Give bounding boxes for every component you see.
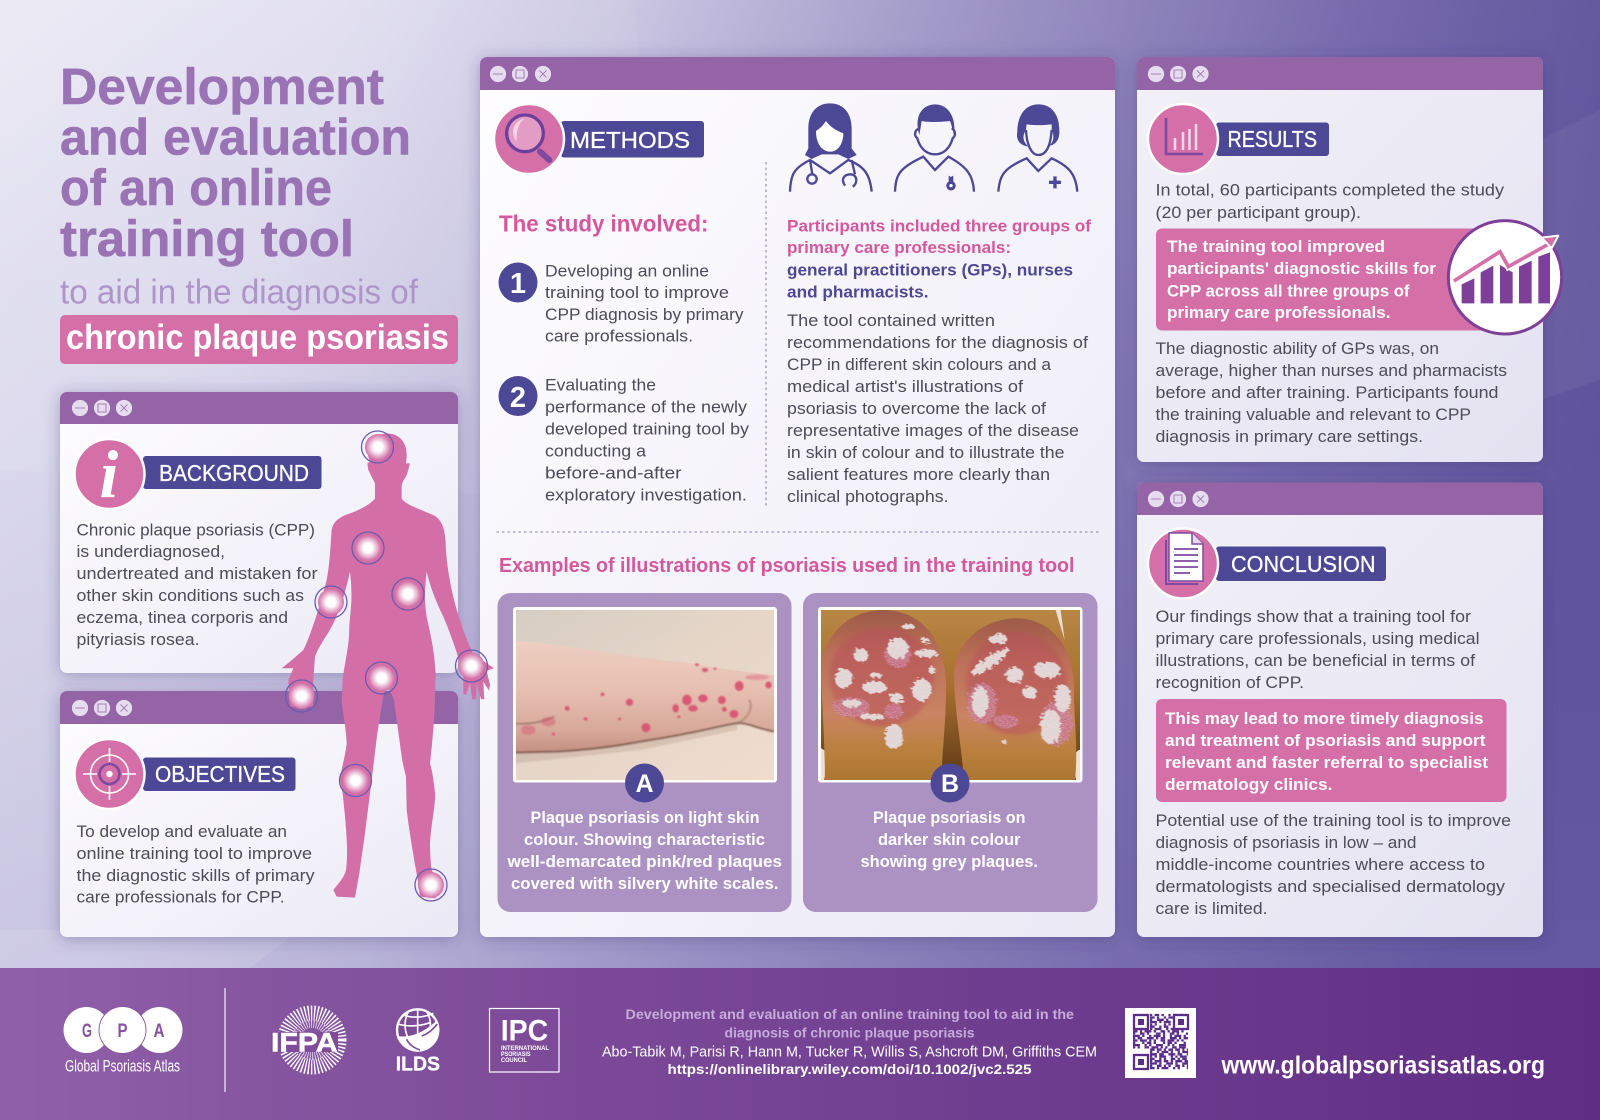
logo: IPC: IPC xyxy=(501,1015,548,1048)
step 2: before-and-after xyxy=(545,464,682,482)
step 2: exploratory investigation. xyxy=(545,486,747,504)
label: results: RESULTS xyxy=(1228,126,1317,152)
caption B xyxy=(860,808,1038,871)
objectives text: care professionals for CPP. xyxy=(76,888,284,906)
icon: nurse xyxy=(895,104,974,192)
caption A: colour. Showing characteristic xyxy=(524,830,765,849)
background text: Chronic plaque psoriasis (CPP) xyxy=(76,520,315,540)
card A xyxy=(498,593,792,912)
citation xyxy=(602,1006,1097,1077)
caption A xyxy=(506,808,782,893)
panel: methods xyxy=(480,57,1115,937)
panel: objectives xyxy=(60,691,458,937)
caption B: Plaque psoriasis on xyxy=(873,808,1026,827)
title: training tool xyxy=(60,210,354,267)
title xyxy=(60,58,419,312)
background text: undertreated and mistaken for xyxy=(76,564,318,583)
icon: doctor xyxy=(790,103,872,192)
logo: IPC: COUNCIL xyxy=(501,1058,527,1064)
step 1: training tool to improve xyxy=(545,283,729,302)
spot: abdomen xyxy=(392,578,424,610)
background text: is underdiagnosed, xyxy=(76,542,225,561)
callout: improved skills: primary care professionals. xyxy=(1167,303,1390,322)
badge B xyxy=(930,764,970,802)
participants text: and pharmacists. xyxy=(787,282,928,302)
conclusion intro: illustrations, can be beneficial in terms of xyxy=(1156,651,1475,670)
callout: improved skills: The training tool improved xyxy=(1167,237,1385,256)
icon: bar chart xyxy=(1148,104,1218,174)
objectives text: online training tool to improve xyxy=(76,844,312,863)
objectives text: the diagnostic skills of primary xyxy=(76,866,315,885)
logo: IFPA xyxy=(271,1013,339,1067)
caption B: darker skin colour xyxy=(878,830,1021,849)
callout: timely diagnosis: and treatment of psoriasis and support xyxy=(1165,731,1486,750)
badge A: A xyxy=(635,770,654,798)
caption A: well-demarcated pink/red plaques xyxy=(506,852,782,871)
window controls xyxy=(490,66,552,82)
QR code xyxy=(1125,1008,1196,1078)
spot: right hand xyxy=(456,650,488,682)
citation: diagnosis of chronic plaque psoriasis xyxy=(724,1024,975,1040)
results detail: the training valuable and relevant to CPP xyxy=(1156,405,1471,424)
heading: examples: Examples of illustrations of psoriasis used in the training tool xyxy=(499,555,1074,577)
callout: timely diagnosis: dermatology clinics. xyxy=(1165,775,1332,794)
step 2: conducting a xyxy=(545,442,647,460)
spot: left hand xyxy=(286,680,318,712)
results intro: In total, 60 participants completed the study xyxy=(1156,180,1505,200)
logo: IFPA: IFPA xyxy=(271,1028,338,1058)
results intro xyxy=(1156,180,1505,222)
icon: magnifying glass xyxy=(494,104,564,174)
icon: rising chart xyxy=(1448,221,1562,334)
card B xyxy=(803,593,1098,912)
panel: background xyxy=(60,392,458,673)
tool description: The tool contained written xyxy=(787,311,995,330)
logo: IPC: PSORIASIS xyxy=(501,1052,530,1058)
objectives text xyxy=(76,822,315,906)
spot: knee xyxy=(340,764,372,796)
objectives text: To develop and evaluate an xyxy=(76,822,287,841)
conclusion detail: dermatologists and specialised dermatology xyxy=(1156,877,1506,896)
body figure with spots xyxy=(282,431,494,901)
callout: improved skills: participants' diagnostic skills for xyxy=(1167,259,1436,278)
results detail: before and after training. Participants found xyxy=(1156,383,1498,402)
tool description xyxy=(787,311,1088,506)
logo: Global Psoriasis Atlas: P xyxy=(118,1021,128,1042)
spot: head xyxy=(362,431,394,463)
citation: Development and evaluation of an online training tool to aid in the xyxy=(626,1006,1074,1022)
step 1: 1 xyxy=(510,268,526,300)
icon: target xyxy=(74,739,144,809)
step 2: performance of the newly xyxy=(545,398,748,416)
step 2: Evaluating the xyxy=(545,376,656,394)
panel: results xyxy=(1137,57,1562,462)
badge B: B xyxy=(941,770,959,798)
label: methods: METHODS xyxy=(570,127,690,153)
callout: timely diagnosis xyxy=(1156,699,1506,802)
title: of an online xyxy=(60,159,332,216)
tool description: representative images of the disease xyxy=(787,421,1079,440)
window controls xyxy=(72,700,132,716)
background text: eczema, tinea corporis and xyxy=(76,608,288,627)
results detail: diagnosis in primary care settings. xyxy=(1156,427,1423,446)
label: results xyxy=(1216,122,1329,156)
tool description: in skin of colour and to illustrate the xyxy=(787,443,1064,462)
illustration A: arm xyxy=(515,610,775,780)
spot: hip xyxy=(366,662,398,694)
callout: timely diagnosis: relevant and faster referral to specialist xyxy=(1165,753,1488,772)
label: objectives: OBJECTIVES xyxy=(155,761,285,787)
caption B: showing grey plaques. xyxy=(860,852,1038,871)
logo: IPC xyxy=(490,1008,559,1072)
title: Development xyxy=(60,58,384,115)
callout: improved skills: CPP across all three groups of xyxy=(1167,282,1410,300)
heading: the study involved: The study involved: xyxy=(499,210,708,236)
conclusion intro: Our findings show that a training tool for xyxy=(1156,607,1471,626)
icon: information: i xyxy=(100,436,119,512)
step 2 xyxy=(498,376,750,504)
conclusion detail: Potential use of the training tool is to improve xyxy=(1156,811,1511,830)
step 2: 2 xyxy=(510,382,526,414)
window controls xyxy=(72,400,132,416)
window controls xyxy=(1148,490,1209,508)
icon: information xyxy=(74,436,144,512)
conclusion detail xyxy=(1156,811,1511,918)
logo: ILDS: ILDS xyxy=(396,1054,440,1076)
callout: improved skills xyxy=(1156,228,1506,330)
tool description: CPP in different skin colours and a xyxy=(787,355,1052,374)
background text: other skin conditions such as xyxy=(76,586,304,605)
callout: timely diagnosis: This may lead to more timely diagnosis xyxy=(1165,709,1484,728)
conclusion intro: primary care professionals, using medical xyxy=(1156,629,1480,648)
spot: chest xyxy=(352,532,384,564)
tool description: clinical photographs. xyxy=(787,487,948,506)
spot: left arm xyxy=(315,586,347,618)
conclusion detail: diagnosis of psoriasis in low – and xyxy=(1156,833,1416,852)
tool description: recommendations for the diagnosis of xyxy=(787,333,1088,352)
step 1: Developing an online xyxy=(545,262,709,280)
results intro: (20 per participant group). xyxy=(1156,203,1361,222)
logo: Global Psoriasis Atlas: Global Psoriasis Atlas xyxy=(65,1056,180,1076)
step 1 xyxy=(498,262,744,346)
icon: document xyxy=(1148,528,1218,598)
conclusion intro xyxy=(1156,607,1480,692)
step 1: CPP diagnosis by primary xyxy=(545,305,744,324)
citation: https://onlinelibrary.wiley.com/doi/10.1002/jvc2.525 xyxy=(668,1061,1032,1077)
title highlight: chronic plaque psoriasis: chronic plaque psoriasis xyxy=(66,318,449,357)
panel: conclusion xyxy=(1137,482,1543,937)
participants text: primary care professionals: xyxy=(787,238,1011,257)
participants text: Participants included three groups of xyxy=(787,216,1091,236)
results detail: average, higher than nurses and pharmacists xyxy=(1156,361,1507,380)
website: www.globalpsoriasisatlas.org xyxy=(1221,1052,1545,1080)
label: background: BACKGROUND xyxy=(159,460,309,486)
logo: Global Psoriasis Atlas: A xyxy=(154,1021,165,1042)
caption A: covered with silvery white scales. xyxy=(511,874,778,893)
results detail xyxy=(1156,339,1507,446)
logo: IPC: INTERNATIONAL xyxy=(501,1046,549,1052)
participants text: general practitioners (GPs), nurses xyxy=(787,260,1073,280)
citation: Abo-Tabik M, Parisi R, Hann M, Tucker R, Willis S, Ashcroft DM, Griffiths CEM xyxy=(602,1044,1097,1060)
results detail: The diagnostic ability of GPs was, on xyxy=(1156,339,1439,358)
window controls xyxy=(1148,66,1209,82)
caption A: Plaque psoriasis on light skin xyxy=(530,808,760,827)
background text: pityriasis rosea. xyxy=(76,630,200,649)
logo: Global Psoriasis Atlas: G xyxy=(82,1021,92,1042)
logo: ILDS xyxy=(396,1009,440,1076)
conclusion detail: care is limited. xyxy=(1156,899,1268,918)
footer xyxy=(0,968,1600,1120)
tool description: medical artist's illustrations of xyxy=(787,377,1023,396)
participants text xyxy=(787,216,1091,302)
title: and evaluation xyxy=(60,108,411,166)
step 1: care professionals. xyxy=(545,326,693,346)
tool description: salient features more clearly than xyxy=(787,465,1050,484)
title: to aid in the diagnosis of xyxy=(60,274,419,312)
label: conclusion xyxy=(1216,546,1386,581)
badge A xyxy=(625,764,664,802)
conclusion detail: middle-income countries where access to xyxy=(1156,855,1485,874)
conclusion intro: recognition of CPP. xyxy=(1156,673,1304,692)
background text xyxy=(76,520,318,649)
spot: foot xyxy=(415,869,447,901)
step 2: developed training tool by xyxy=(545,420,750,438)
logo: Global Psoriasis Atlas xyxy=(64,1006,182,1076)
tool description: psoriasis to overcome the lack of xyxy=(787,399,1046,418)
label: conclusion: CONCLUSION xyxy=(1231,551,1376,577)
icon: pharmacist xyxy=(998,104,1077,192)
illustration B: knees xyxy=(818,607,1085,783)
label: methods xyxy=(561,121,704,158)
